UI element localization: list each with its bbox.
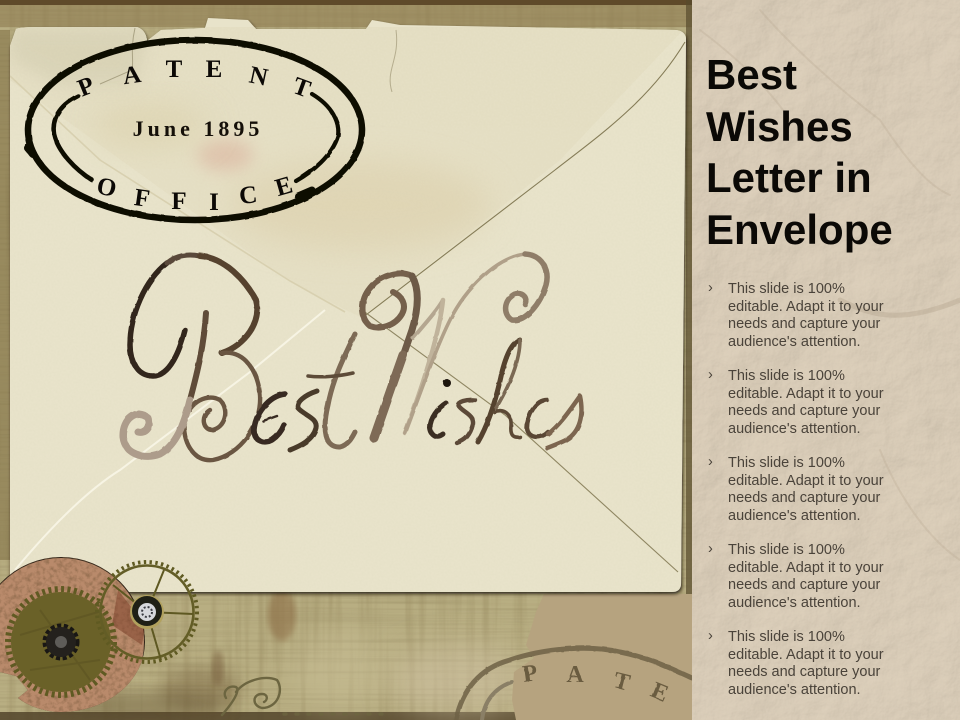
bullet text 5: editable. Adapt it to your bbox=[728, 646, 884, 662]
stamp: Patent Office June 1895: C bbox=[238, 181, 259, 210]
bullet text 4: This slide is 100% bbox=[728, 542, 845, 558]
ghost stamp on background bbox=[456, 648, 692, 720]
bullet text 2: This slide is 100% bbox=[728, 368, 845, 384]
handwritten Best Wishes bbox=[123, 254, 581, 460]
ghost stamp letters: P bbox=[521, 660, 539, 688]
bullet text 3: editable. Adapt it to your bbox=[728, 472, 884, 488]
stamp: Patent Office June 1895: I bbox=[209, 189, 219, 216]
letter B bbox=[123, 255, 260, 460]
stamp: Patent Office June 1895: P bbox=[74, 72, 98, 102]
stamp: Patent Office June 1895: F bbox=[133, 184, 151, 213]
bullet text 1: editable. Adapt it to your bbox=[728, 298, 884, 314]
bullet text 2 bbox=[708, 367, 884, 436]
stamp: Patent Office June 1895: O bbox=[94, 172, 119, 203]
bullet text 3: audience's attention. bbox=[728, 508, 861, 524]
bullet text 5: This slide is 100% bbox=[728, 629, 845, 645]
bullet text 1: › bbox=[708, 280, 713, 296]
letters ishes bbox=[430, 340, 581, 448]
stamp: Patent Office June 1895: T bbox=[166, 56, 183, 83]
bullet text 5: audience's attention. bbox=[728, 682, 861, 698]
bullet text 2: needs and capture your bbox=[728, 403, 880, 419]
stamp: Patent Office June 1895: N bbox=[247, 62, 270, 92]
icon: olive gear wheel bbox=[8, 589, 114, 695]
icon: spoked ring gear bbox=[97, 562, 197, 662]
bullet text 5: › bbox=[708, 628, 713, 644]
bullet text 4: needs and capture your bbox=[728, 577, 880, 593]
stamp: Patent Office June 1895: E bbox=[206, 56, 222, 83]
stamp date: June 1895 bbox=[133, 116, 263, 141]
bullet text 4: › bbox=[708, 541, 713, 557]
panel: crumpled paper sidebar bbox=[692, 0, 960, 720]
bullet text 5 bbox=[708, 628, 884, 698]
icon: swirl ornament bbox=[222, 678, 390, 715]
bullet text 1: audience's attention. bbox=[728, 334, 861, 350]
bullet text 4 bbox=[708, 541, 884, 610]
stamp: Patent Office June 1895: A bbox=[121, 61, 143, 90]
icon: copper gear bbox=[0, 557, 145, 712]
title: Envelope bbox=[706, 206, 893, 253]
bullet text 4: audience's attention. bbox=[728, 594, 861, 610]
bullet text 1 bbox=[708, 280, 884, 350]
bullet text 1: needs and capture your bbox=[728, 316, 880, 332]
ghost stamp letters: E bbox=[647, 677, 672, 708]
stamp: Patent Office June 1895: F bbox=[171, 188, 187, 215]
title: Best bbox=[706, 51, 797, 98]
ghost stamp letters bbox=[521, 660, 672, 708]
letters est bbox=[254, 334, 355, 450]
bullet text 3: › bbox=[708, 454, 713, 470]
stamp: Patent Office June 1895: T bbox=[289, 72, 314, 104]
bullet text 5: needs and capture your bbox=[728, 664, 880, 680]
icon: small black pinion bbox=[45, 626, 77, 658]
bullet text 3 bbox=[708, 454, 884, 524]
bullet text 3: This slide is 100% bbox=[728, 455, 845, 471]
bullet text 2: editable. Adapt it to your bbox=[728, 386, 884, 402]
letter W bbox=[362, 254, 547, 438]
title bbox=[706, 51, 893, 253]
torn paper patch bbox=[512, 594, 692, 720]
ghost stamp letters: T bbox=[611, 668, 633, 697]
stamp: Patent Office June 1895 bbox=[28, 40, 362, 220]
title: Letter in bbox=[706, 154, 872, 201]
envelope fold lines bbox=[10, 28, 685, 572]
ghost stamp letters: A bbox=[566, 662, 584, 688]
upper flap tone bbox=[10, 27, 681, 46]
bullet text 1: This slide is 100% bbox=[728, 281, 845, 297]
bullet text 2: › bbox=[708, 367, 713, 383]
wooden parchment background bbox=[0, 0, 692, 720]
title: Wishes bbox=[706, 103, 853, 150]
bullet text 4: editable. Adapt it to your bbox=[728, 560, 884, 576]
bullet text 2: audience's attention. bbox=[728, 420, 861, 436]
stamp: Patent Office June 1895: E bbox=[272, 172, 296, 202]
bullet text 3: needs and capture your bbox=[728, 490, 880, 506]
envelope bbox=[10, 18, 686, 592]
